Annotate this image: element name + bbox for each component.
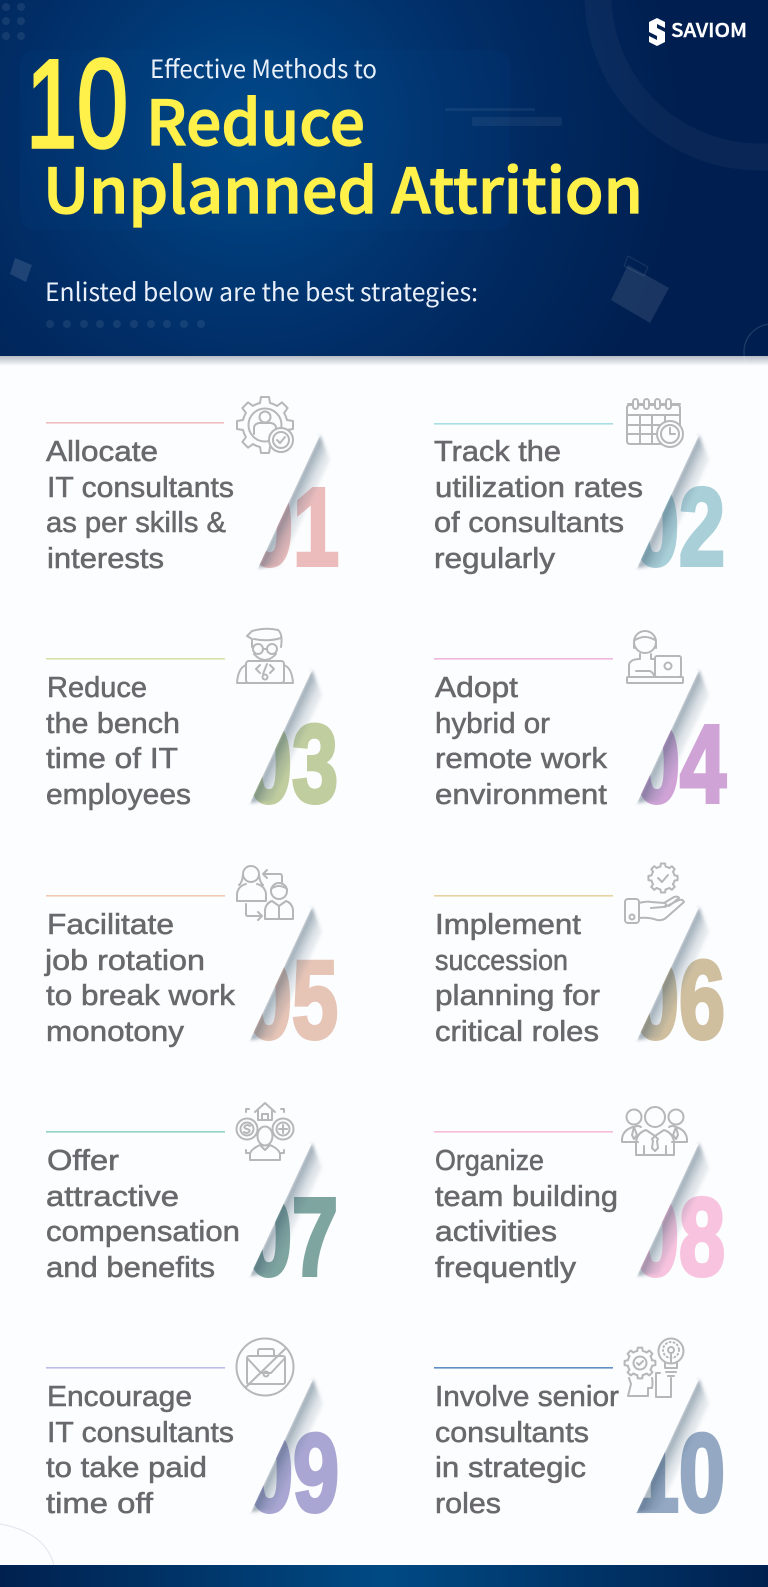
text: Organize team building activities frequently [435,1145,618,1284]
text: Offer attractive compensation and benefits: Offer [47,1145,119,1177]
text: Facilitate job rotation to break work monotony [44,909,236,1048]
text: Organize team building activities frequently: team building [435,1181,618,1213]
icon: calendar with clock [627,399,683,447]
text: Track the utilization rates of consultants regularly: utilization rates [435,472,643,504]
number 08 with fold: 08 [633,1176,725,1299]
text: Facilitate job rotation to break work monotony: Facilitate [47,909,174,941]
item 06 [434,863,725,1062]
title: Unplanned Attrition [43,141,643,231]
title: Effective Methods to [150,50,377,86]
text: Implement succession planning for critical roles: Implement [435,909,581,941]
text: Organize team building activities frequently: frequently [435,1252,577,1284]
accent line [46,1367,225,1369]
item 02 [434,399,725,589]
number 09 with fold [216,1379,339,1535]
decorative arc [0,1524,54,1565]
icon: compensation and benefits [236,1103,294,1160]
accent line [434,423,613,425]
icon: gear head and light bulb [624,1338,684,1397]
text: Facilitate job rotation to break work monotony: to break work [46,980,236,1012]
text: Track the utilization rates of consultants regularly: of consultants [434,507,624,539]
accent line [434,895,613,897]
number 03 with fold [215,670,338,826]
number 10 with fold: 10 [633,1412,725,1535]
icon: developer with laptop [237,629,293,683]
text: Adopt hybrid or remote work environment [435,672,608,811]
number 07 with fold [215,1143,338,1299]
logo: Saviom [649,16,747,46]
text: Allocate IT consultants as per skills & interests: IT consultants [47,472,234,504]
number 01 with fold: 01 [247,466,339,589]
text: Allocate IT consultants as per skills & interests [46,436,234,575]
text: Encourage IT consultants to take paid time off: time off [46,1488,154,1520]
item 05 [44,866,338,1062]
text: Allocate IT consultants as per skills & interests: Allocate [46,436,158,468]
text: Organize team building activities frequently: Organize [435,1145,544,1177]
title [26,35,643,231]
number 01 with fold [223,435,339,589]
text: Implement succession planning for critical roles: critical roles [435,1016,599,1048]
item 07 [46,1103,338,1299]
item 01 [46,397,339,589]
number 06 with fold [602,907,725,1062]
text: Reduce the bench time of IT employees: employees [46,779,191,811]
text: Encourage IT consultants to take paid time off: to take paid [46,1452,207,1484]
text: Offer attractive compensation and benefits: compensation [46,1216,240,1248]
text: Involve senior consultants in strategic roles: consultants [435,1417,589,1449]
title: Reduce [146,73,365,163]
text: Reduce the bench time of IT employees: time of IT [46,743,178,775]
text: Offer attractive compensation and benefits: and benefits [46,1252,215,1284]
icon: team of three people [622,1107,687,1155]
text: Involve senior consultants in strategic roles: roles [435,1488,501,1520]
accent line [46,895,225,897]
accent line [434,1367,613,1369]
item 04 [434,631,726,826]
item 08 [434,1107,725,1299]
text: Encourage IT consultants to take paid time off: IT consultants [47,1417,234,1449]
item 03 [46,629,338,826]
number 02 with fold [602,435,725,589]
accent line [46,422,224,424]
text: Implement succession planning for critical roles: succession [435,945,568,977]
accent line [46,1131,225,1133]
number 06 with fold: 06 [633,939,725,1062]
number 04 with fold [602,670,726,826]
text: Allocate IT consultants as per skills & interests: interests [47,543,164,575]
text: Implement succession planning for critical roles: planning for [435,980,600,1012]
icon: remote worker with laptop [627,631,683,683]
text: Encourage IT consultants to take paid time off [46,1381,234,1520]
text: Offer attractive compensation and benefits: attractive [46,1181,179,1213]
text: Involve senior consultants in strategic roles [435,1381,619,1520]
text: Adopt hybrid or remote work environment: remote work [435,743,608,775]
accent line [46,658,225,660]
number 05 with fold: 05 [246,939,338,1062]
text: Facilitate job rotation to break work monotony: monotony [46,1016,185,1048]
icon: hand holding gear [625,863,684,923]
text: Track the utilization rates of consultants regularly: regularly [434,543,556,575]
accent line [434,658,613,660]
number 02 with fold: 02 [633,466,725,589]
text: Encourage IT consultants to take paid time off: Encourage [47,1381,192,1413]
icon: gear with person and check [237,397,293,453]
text: Reduce the bench time of IT employees: Reduce [47,672,147,704]
text: Adopt hybrid or remote work environment: hybrid or [435,708,550,740]
number 05 with fold [215,907,338,1062]
text: Organize team building activities frequently: activities [435,1216,557,1248]
text: Adopt hybrid or remote work environment: Adopt [435,672,518,704]
text: Implement succession planning for critical roles [435,909,600,1048]
text: Reduce the bench time of IT employees [46,672,191,811]
icon: job rotation people [237,866,293,920]
text: Facilitate job rotation to break work monotony: job rotation [44,945,205,977]
icon: no briefcase [236,1338,294,1396]
text: Track the utilization rates of consultants regularly [434,436,643,575]
text: Allocate IT consultants as per skills & interests: as per skills & [46,507,226,539]
number 10 with fold [602,1379,725,1535]
accent line [434,1131,613,1133]
logo: Saviom: SAVIOM [671,16,747,43]
text: Offer attractive compensation and benefits [46,1145,240,1284]
number 03 with fold: 03 [246,703,338,826]
number 09 with fold: 09 [247,1412,339,1535]
number 07 with fold: 07 [246,1176,338,1299]
header banner [0,0,768,380]
footer band [0,1565,768,1587]
number 08 with fold [602,1143,725,1299]
title: 10 [26,35,128,174]
text: Involve senior consultants in strategic roles: Involve senior [435,1381,619,1413]
subtitle: Enlisted below are the best strategies: [45,273,478,309]
item 10 [434,1338,725,1535]
text: Reduce the bench time of IT employees: the bench [46,708,180,740]
text: Track the utilization rates of consultants regularly: Track the [434,436,561,468]
number 04 with fold: 04 [634,703,726,826]
item 09 [46,1338,339,1535]
text: Adopt hybrid or remote work environment: environment [435,779,607,811]
text: Involve senior consultants in strategic roles: in strategic [435,1452,586,1484]
